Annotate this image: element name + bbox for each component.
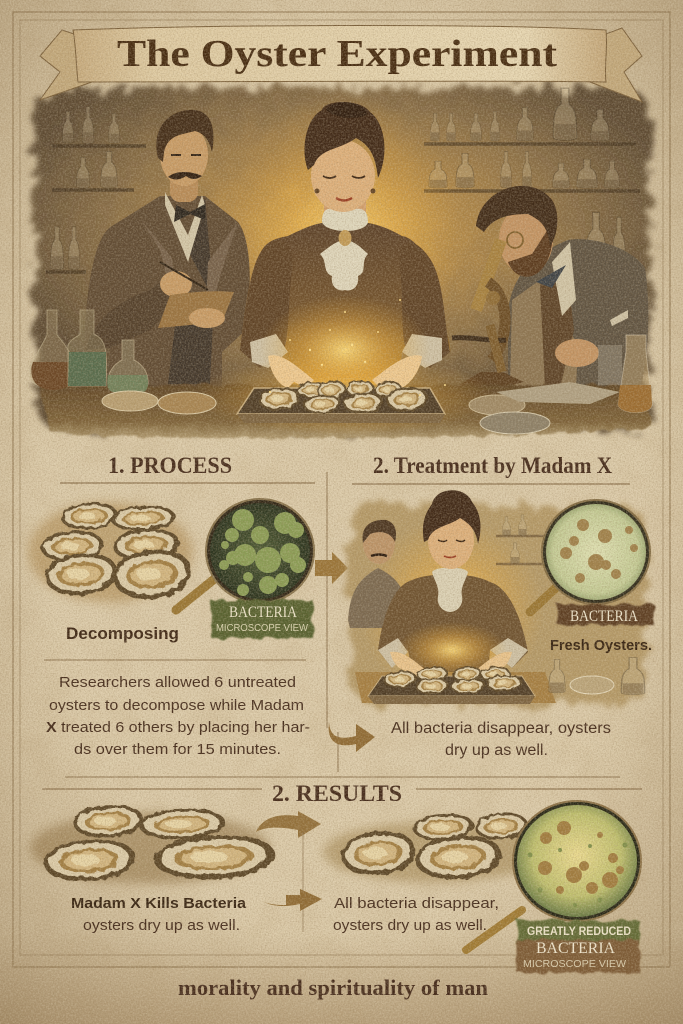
glow behind woman	[230, 90, 460, 390]
process description: Researchers allowed 6 untreated	[59, 674, 296, 691]
footer caption: morality and spirituality of man	[178, 975, 488, 1000]
treatment description: dry up as well.	[445, 742, 548, 759]
label: greatly reduced bacteria: MICROSCOPE VIEW	[523, 958, 626, 970]
ribbon tails	[40, 28, 642, 102]
curved arrow top	[256, 811, 321, 838]
arrow: to treatment outcome	[329, 722, 375, 752]
process description: X treated 6 others by placing her har-	[46, 719, 310, 736]
right result text: All bacteria disappear,	[334, 895, 499, 912]
scene background	[350, 505, 646, 703]
small shelves	[496, 515, 545, 564]
panel: results	[30, 781, 642, 973]
magnifier: greatly reduced bacteria	[466, 801, 641, 950]
treatment description	[391, 720, 611, 759]
panel: process	[28, 453, 315, 758]
label: bacteria microscope view: BACTERIA	[229, 604, 297, 621]
treatment description: All bacteria disappear, oysters	[391, 720, 611, 737]
arrow: process to treatment	[315, 552, 348, 584]
heading: results: 2. RESULTS	[272, 781, 402, 806]
label: greatly reduced bacteria: GREATLY REDUCED	[527, 926, 631, 938]
caption: fresh oysters: Fresh Oysters.	[550, 637, 652, 654]
left result text	[71, 896, 247, 934]
right oysters	[323, 813, 547, 882]
right result text	[333, 895, 499, 934]
heading: process: 1. PROCESS	[108, 453, 232, 478]
oysters decomposing	[28, 502, 192, 602]
table strip	[355, 672, 556, 703]
hero illustration: laboratory scene	[30, 88, 652, 438]
caption: decomposing: Decomposing	[66, 624, 179, 643]
left oysters	[30, 805, 275, 884]
ribbon body	[73, 25, 607, 82]
process description	[46, 674, 310, 758]
label: bacteria	[557, 604, 654, 625]
hands over oysters	[268, 355, 422, 390]
panel: treatment by Madam X	[348, 453, 654, 759]
table	[40, 295, 652, 438]
label: bacteria microscope view	[211, 600, 313, 638]
tray of oysters	[237, 381, 445, 423]
man in background	[348, 520, 408, 628]
process description: oysters to decompose while Madam	[49, 697, 304, 714]
shelves with bottles right	[424, 88, 640, 268]
small glassware	[549, 658, 645, 695]
flasks and petri dishes	[30, 310, 652, 434]
sparkles	[269, 299, 446, 396]
microscope	[452, 240, 524, 390]
divider between columns	[327, 472, 338, 772]
figure: man with notebook	[84, 110, 250, 388]
left result text: oysters dry up as well.	[83, 917, 240, 934]
curved arrow bottom	[264, 889, 322, 911]
woman	[378, 490, 528, 678]
treatment scene	[348, 490, 646, 704]
process description: ds over them for 15 minutes.	[74, 741, 281, 758]
label: bacteria: BACTERIA	[570, 608, 638, 625]
title text: The Oyster Experiment	[117, 33, 557, 75]
heading: treatment: 2. Treatment by Madam X	[373, 453, 612, 478]
tray with oysters	[368, 667, 535, 704]
label: greatly reduced bacteria	[517, 920, 639, 973]
magnifier: reduced bacteria	[530, 500, 650, 612]
shelves with bottles left	[46, 107, 146, 272]
figure: woman in Victorian dress	[240, 102, 450, 385]
lab background	[34, 88, 650, 428]
label: bacteria microscope view: MICROSCOPE VIEW	[216, 622, 308, 634]
right result text: oysters dry up as well.	[333, 917, 487, 934]
left result text: Madam X Kills Bacteria	[71, 896, 247, 912]
magnifier: bacteria microscope view	[176, 499, 314, 610]
title ribbon	[40, 25, 642, 102]
label: greatly reduced bacteria: BACTERIA	[536, 940, 616, 957]
figure: microscope scientist	[476, 186, 648, 390]
